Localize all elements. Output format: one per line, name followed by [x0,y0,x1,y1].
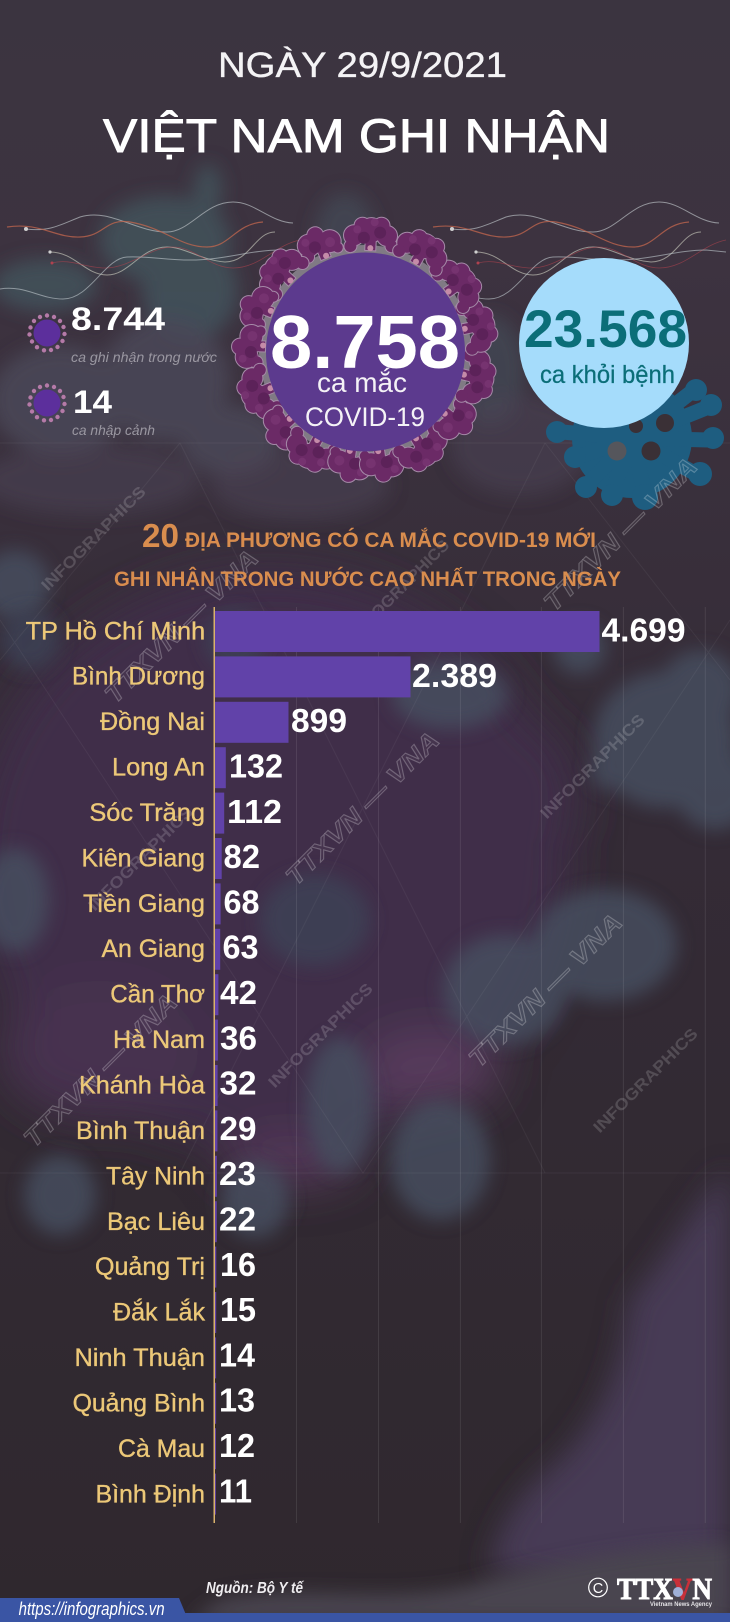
chart heading: GHI NHẬN TRONG NƯỚC CAO NHẤT TRONG NGÀY [114,567,621,591]
watermarks: TTXVN — VNA [463,908,628,1073]
footer bar [0,1598,730,1622]
number 23.568: 23.568 [524,300,687,359]
source: Nguồn: Bộ Y tế [206,1580,304,1597]
row: Ninh Thuận: 14 [219,1336,256,1373]
row: Cà Mau: Cà Mau [118,1435,205,1463]
watermarks: INFOGRAPHICS [266,980,377,1092]
row: Kiên Giang: Kiên Giang [82,844,205,872]
row: Tây Ninh [106,1155,256,1197]
row: Đắk Lắk: 15 [220,1291,256,1328]
decorative wave lines right [426,202,726,299]
row: An Giang: 63 [222,929,258,966]
stat: imported cases [27,383,155,438]
title: main: VIỆT NAM GHI NHẬN [103,109,610,162]
chart heading [114,517,621,591]
row: Đồng Nai: Đồng Nai [100,708,205,736]
row: Bạc Liêu: 22 [219,1200,256,1238]
blurred virus backdrop chart: teal lumps [0,550,730,1238]
row: Quảng Bình: 13 [219,1382,255,1419]
icon: small virus [27,383,67,422]
lattice lines [0,443,730,1173]
watermarks: INFOGRAPHICS [39,483,150,595]
watermarks: INFOGRAPHICS [86,803,197,915]
watermarks: TTXVN — VNA [18,988,183,1153]
row: Bình Dương: 2.389 [412,657,497,694]
row: Bình Thuận [76,1110,256,1151]
row: Cần Thơ: 42 [220,974,257,1011]
row: Tây Ninh: Tây Ninh [106,1162,205,1190]
row: Ninh Thuận [74,1336,256,1378]
row: Quảng Bình: Quảng Bình [73,1389,205,1417]
row: Khánh Hòa: Khánh Hòa [79,1072,205,1100]
purple circle [266,252,465,452]
caption domestic: ca ghi nhận trong nước [71,349,217,365]
icon: small virus [27,313,67,352]
row: Cần Thơ [110,974,257,1015]
row: Bình Thuận: Bình Thuận [76,1117,205,1145]
row: TP Hồ Chí Minh: TP Hồ Chí Minh [26,617,205,645]
axis line [214,607,215,1523]
recovered circle [519,258,689,428]
watermarks: TTXVN — VNA [99,544,264,709]
row: Cần Thơ: Cần Thơ [110,981,205,1009]
row: Đắk Lắk [113,1291,256,1333]
row: Bình Định: Bình Định [96,1480,205,1508]
row: Kiên Giang: 82 [224,838,260,875]
row: Bình Định: 11 [219,1472,252,1509]
row: Sóc Trăng [89,793,282,834]
number 8.744: 8.744 [71,301,165,337]
number 8.758: 8.758 [270,300,460,384]
big virus with total [231,216,501,485]
row: Sóc Trăng: Sóc Trăng [89,799,205,827]
bar chart [26,607,705,1523]
blurred bottom right shape [489,1170,730,1622]
row: Quảng Bình [73,1382,255,1424]
row: Bạc Liêu [107,1200,256,1242]
row: Tiền Giang [83,883,260,924]
title: date: NGÀY 29/9/2021 [218,46,507,85]
row: Khánh Hòa: 32 [220,1065,256,1102]
virus spikes [231,216,501,485]
row: An Giang [102,929,258,970]
row: Kiên Giang [82,838,260,879]
watermarks: INFOGRAPHICS [349,537,453,641]
row: Hà Nam: 36 [220,1019,257,1056]
row: Tiền Giang: 68 [224,883,260,920]
chart heading: ĐỊA PHƯƠNG CÓ CA MẮC COVID-19 MỚI [185,528,596,552]
row: Bình Dương: Bình Dương [72,663,205,691]
row: Long An [112,747,283,788]
watermarks: INFOGRAPHICS [538,711,649,823]
icon: recovered virus blue [546,378,724,510]
row: Đồng Nai [100,702,347,743]
row: Long An: 132 [229,748,283,784]
row: Hà Nam [113,1019,257,1061]
row: Cà Mau: 12 [219,1427,255,1464]
row: Quảng Trị: Quảng Trị [95,1253,205,1281]
caption imported: ca nhập cảnh [72,422,155,438]
row: TP Hồ Chí Minh: 4.699 [602,612,686,649]
row: Quảng Trị: 16 [220,1246,256,1283]
watermarks [18,452,703,1153]
row: An Giang: An Giang [102,935,205,963]
row: Ninh Thuận: Ninh Thuận [74,1344,205,1372]
row: Long An: Long An [112,754,205,782]
row: Cà Mau [118,1427,255,1469]
caption COVID-19: COVID-19 [305,402,425,432]
watermarks: TTXVN — VNA [280,726,445,891]
row: Sóc Trăng: 112 [227,793,282,830]
watermarks: TTXVN — VNA [538,452,703,617]
website url: https://infographics.vn [19,1599,165,1619]
decorative wave lines left [0,202,300,299]
row: Tiền Giang: Tiền Giang [83,890,205,918]
caption ca mắc: ca mắc [317,367,407,398]
row: Đắk Lắk: Đắk Lắk [113,1298,205,1327]
watermarks: INFOGRAPHICS [591,1025,702,1137]
chart heading: 20 [142,517,179,554]
number 14: 14 [73,384,112,420]
row: Tây Ninh: 23 [219,1155,256,1192]
blurred virus backdrop chart: purple core [0,570,580,1186]
row: Đồng Nai: 899 [291,702,347,739]
logo TTXVN: C [593,1580,603,1597]
row: TP Hồ Chí Minh [26,611,686,652]
logo TTXVN: Vietnam News Agency [650,1602,713,1608]
row: Quảng Trị [95,1246,256,1288]
logo TTXVN: TTXVN [617,1571,712,1606]
row: Hà Nam: Hà Nam [113,1026,205,1054]
caption recovered: ca khỏi bệnh [540,361,675,389]
row: Khánh Hòa [79,1065,256,1106]
row: Bình Thuận: 29 [220,1110,256,1147]
stat: domestic cases [27,301,217,365]
row: Bạc Liêu: Bạc Liêu [107,1208,205,1236]
row: Bình Dương [72,656,497,697]
blurred virus backdrop top [0,164,590,520]
row: Bình Định [96,1472,252,1515]
